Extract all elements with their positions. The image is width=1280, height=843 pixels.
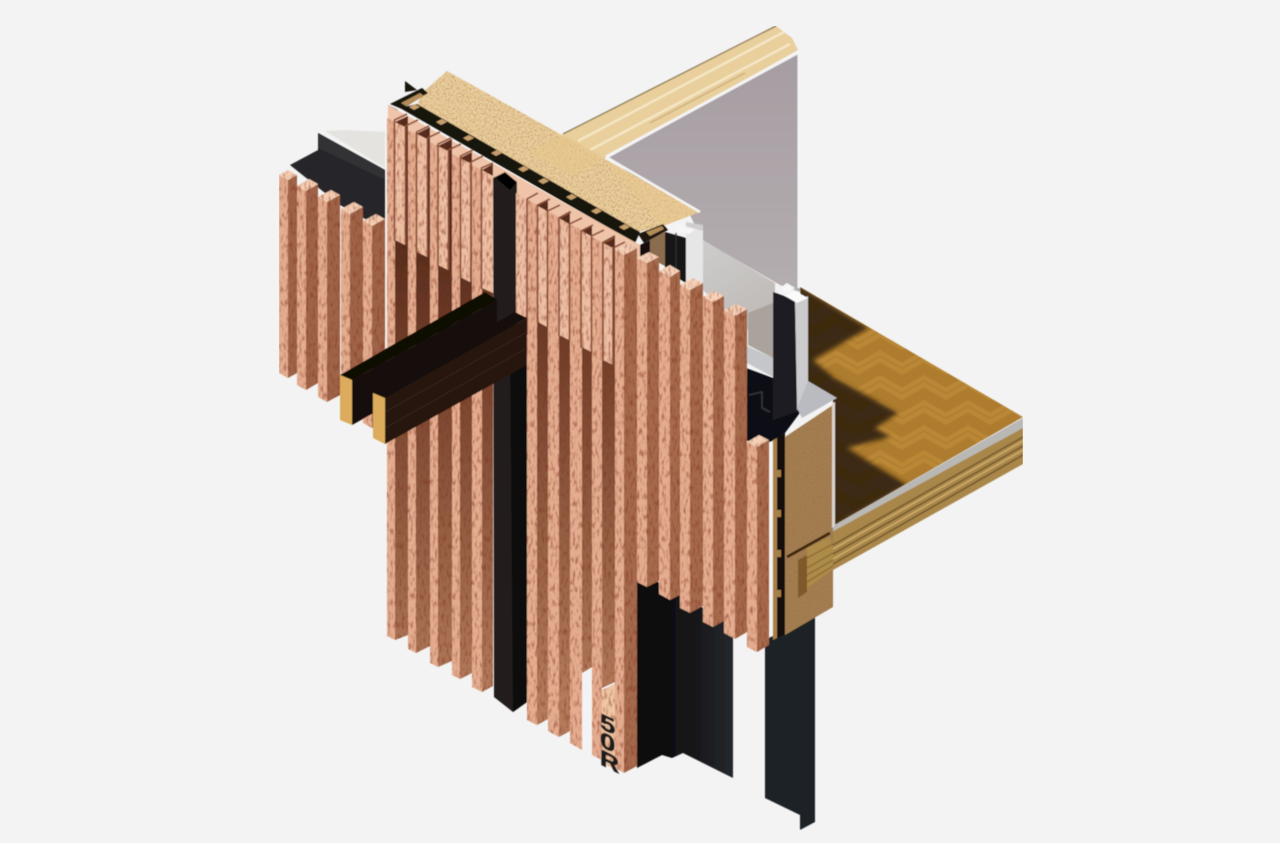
slat lettering: 0 <box>600 726 615 758</box>
timber slats <box>279 116 769 773</box>
floor shadow <box>800 287 908 525</box>
top slab <box>388 71 700 243</box>
slat lettering: 5 <box>600 708 616 740</box>
long slats centre-right <box>527 199 615 760</box>
pale slat header band <box>388 105 640 264</box>
long slats centre-left <box>387 116 493 692</box>
slat lettering <box>600 708 619 779</box>
left slat group <box>279 170 385 428</box>
slat lettering: R <box>600 744 619 779</box>
floor slab plywood edge <box>830 418 1023 570</box>
rear black channel <box>290 130 385 230</box>
window frame and glazing <box>638 226 837 446</box>
lower steel column right <box>765 615 815 830</box>
OSB structural block <box>773 402 835 640</box>
lower steel I-beam <box>637 570 733 778</box>
slab black cavity band <box>400 104 640 243</box>
herringbone floor <box>790 280 1023 532</box>
black steel column <box>493 172 527 712</box>
rear plywood wall section <box>563 26 798 168</box>
tan slat end piece <box>602 684 615 770</box>
dark timber cross beam rear <box>340 292 497 425</box>
slat gap lines <box>394 114 625 365</box>
short slats centre-right <box>516 193 613 365</box>
grey interior wall <box>606 52 800 330</box>
dark timber cross beam front <box>373 312 527 444</box>
axonometric facade detail drawing <box>279 26 1023 830</box>
short slats centre-left <box>395 122 493 293</box>
full assembly <box>279 26 1023 830</box>
main corner slat and right slats <box>615 243 769 773</box>
